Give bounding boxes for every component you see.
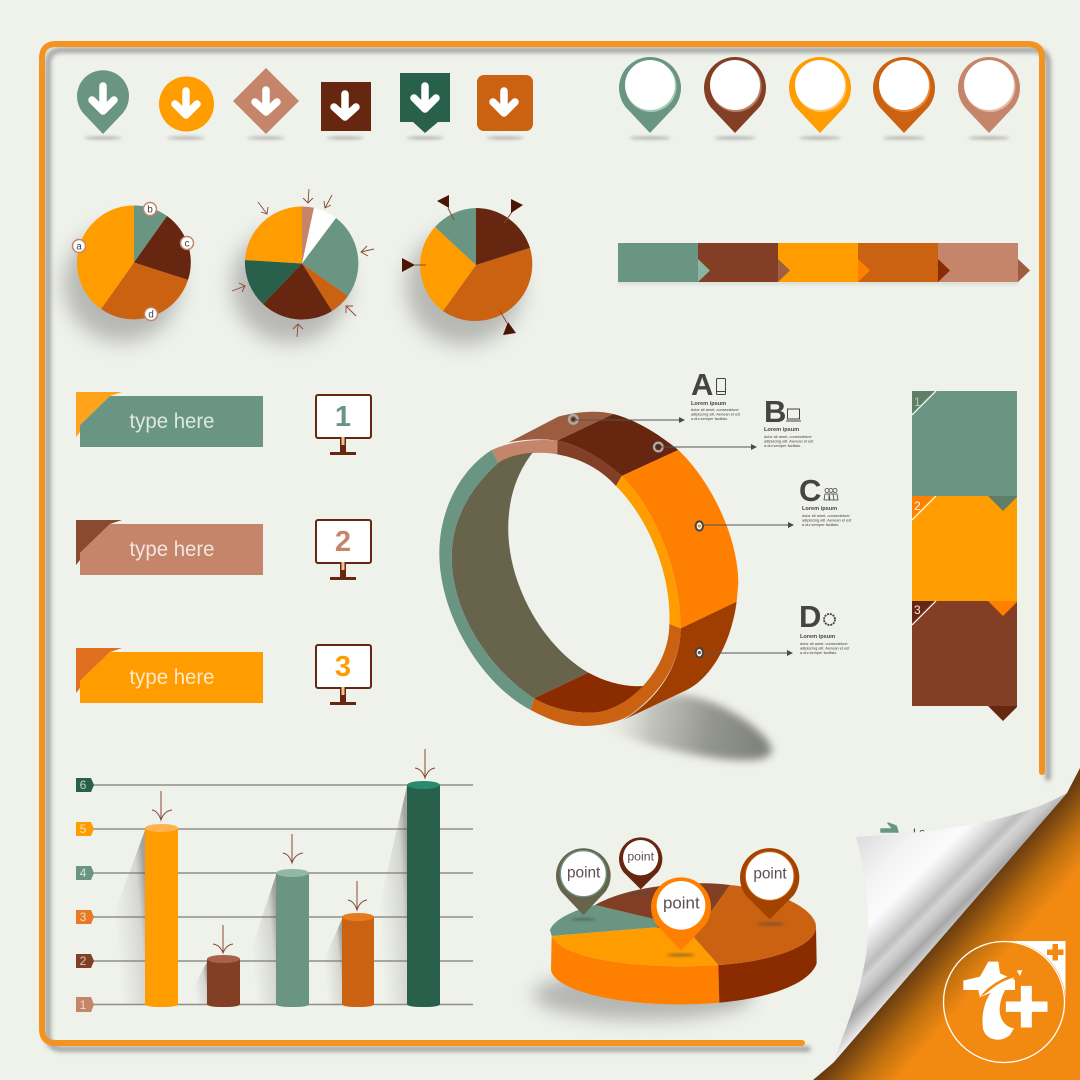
- callout C: adipiscing elit. Aenean et est: [802, 518, 852, 522]
- label bubbles: a: [76, 242, 82, 252]
- gridlines and tags: 2: [80, 954, 87, 968]
- bar: orange: [145, 824, 178, 1007]
- callout C: a dui semper facilisis.: [802, 522, 839, 527]
- pie chart: four slices with flags: [402, 195, 532, 345]
- banner 2: type here: type here: [130, 537, 214, 561]
- banner 3: type here: type here: [130, 665, 214, 689]
- icon: people: [824, 488, 838, 500]
- callout arrows: [576, 417, 794, 656]
- gridlines and tags: 3: [80, 910, 87, 924]
- monitor 3: 3: [335, 651, 351, 683]
- map pin: sage: [619, 57, 681, 139]
- value arrows: [152, 749, 435, 953]
- pin: point rust: point: [753, 866, 787, 883]
- vertical stacked tabs: 1: [914, 395, 921, 409]
- pin: point orange: [651, 877, 711, 956]
- icon: sage pin with down arrow: [77, 70, 129, 139]
- callout D: [799, 599, 850, 655]
- icon: phone: [716, 378, 726, 394]
- label bubbles: c: [184, 238, 190, 250]
- callout D: adipiscing elit. Aenean et est: [800, 646, 850, 650]
- callout A: a dui semper facilisis.: [691, 416, 728, 421]
- icon: orange circle with down arrow: [159, 76, 214, 139]
- vertical stacked tabs: 2: [914, 499, 921, 513]
- 3D pie chart with pins: [533, 837, 817, 1020]
- icon: dark brown square with down arrow: [321, 82, 371, 139]
- peeking text under curl: Lo: [913, 827, 925, 839]
- callout C: [799, 473, 852, 527]
- label bubbles: d: [148, 310, 154, 320]
- map pin: brown: [704, 57, 766, 139]
- bar: dark green: [407, 781, 440, 1007]
- pin: point orange: point: [663, 894, 700, 913]
- callout B: adipiscing elit. Aenean et est: [764, 438, 814, 444]
- icon: rust rounded square with down arrow: [477, 75, 533, 139]
- callout B: B: [764, 394, 786, 429]
- map pin: tan: [958, 57, 1020, 139]
- pie chart: labelled a b c d: [64, 202, 194, 342]
- pin: point brown: point: [627, 849, 655, 863]
- callout B: [764, 394, 814, 448]
- callout C: dolor sit amet, consectetuer: [802, 513, 850, 518]
- flag markers: [402, 195, 523, 335]
- callout C: Lorem ipsum: [802, 506, 837, 512]
- bar chart: [76, 749, 473, 1012]
- peeking text under curl: [881, 823, 925, 839]
- bar shadows: [112, 786, 407, 1004]
- logo: [944, 941, 1066, 1062]
- icon: gear: [824, 614, 835, 625]
- icon: tan diamond with down arrow: [233, 68, 299, 139]
- 3D ring chart: [439, 412, 772, 760]
- monitor 1: [316, 395, 371, 455]
- orange page corner: [813, 768, 1080, 1080]
- banner 1: type here: type here: [130, 409, 214, 433]
- callout B: dolor sit amet, consectetuer: [764, 434, 812, 439]
- pin: point brown: [619, 837, 662, 895]
- ring marker dots: [569, 415, 703, 657]
- label bubbles: b: [147, 204, 153, 216]
- bar: sage: [276, 869, 309, 1007]
- gridlines and tags: 1: [80, 998, 87, 1012]
- callout A: A: [691, 367, 713, 402]
- callout D: a dui semper facilisis.: [800, 650, 837, 655]
- pin: point sage: point: [567, 864, 601, 881]
- banner 2: type here: [76, 520, 263, 575]
- icon: green callout with down arrow: [400, 73, 450, 139]
- monitor 2: 2: [335, 526, 351, 558]
- callout A: Lorem ipsum: [691, 401, 726, 407]
- banner 3: type here: [76, 648, 263, 703]
- callout B: Lorem ipsum: [764, 427, 799, 433]
- map pin: rust: [873, 57, 935, 139]
- pie chart: seven slices with arrows: [232, 189, 374, 343]
- callout A: dolor sit amet, consectetuer: [691, 407, 739, 412]
- map pin: orange: [789, 57, 851, 139]
- monitor 1: 1: [335, 401, 351, 433]
- chevron ribbon: [618, 243, 1030, 284]
- callout C: C: [799, 473, 821, 508]
- gridlines and tags: 4: [80, 866, 87, 880]
- label bubbles: [72, 202, 194, 320]
- pin: point sage: [556, 848, 611, 921]
- callout A: adipiscing elit. Aenean et est: [691, 412, 741, 416]
- callout D: D: [799, 599, 821, 634]
- monitor 3: [316, 645, 371, 705]
- callout D: Lorem ipsum: [800, 634, 835, 640]
- callout A: [691, 367, 741, 421]
- callout B: a dui semper facilisis.: [764, 443, 801, 448]
- monitor 2: [316, 520, 371, 580]
- banner 1: type here: [76, 392, 263, 447]
- pin: point rust: [740, 848, 799, 925]
- page curl: [833, 793, 1067, 1063]
- gridlines and tags: 5: [80, 822, 87, 836]
- bar: rust: [342, 913, 374, 1007]
- vertical stacked tabs: 3: [914, 603, 921, 617]
- vertical stacked tabs: [912, 391, 1017, 721]
- icon: laptop: [786, 409, 801, 421]
- gridlines and tags: [76, 778, 473, 1012]
- bar: brown: [207, 955, 240, 1007]
- gridlines and tags: 6: [80, 778, 87, 792]
- callout D: dolor sit amet, consectetuer: [800, 641, 848, 646]
- pointer arrows: [232, 189, 374, 337]
